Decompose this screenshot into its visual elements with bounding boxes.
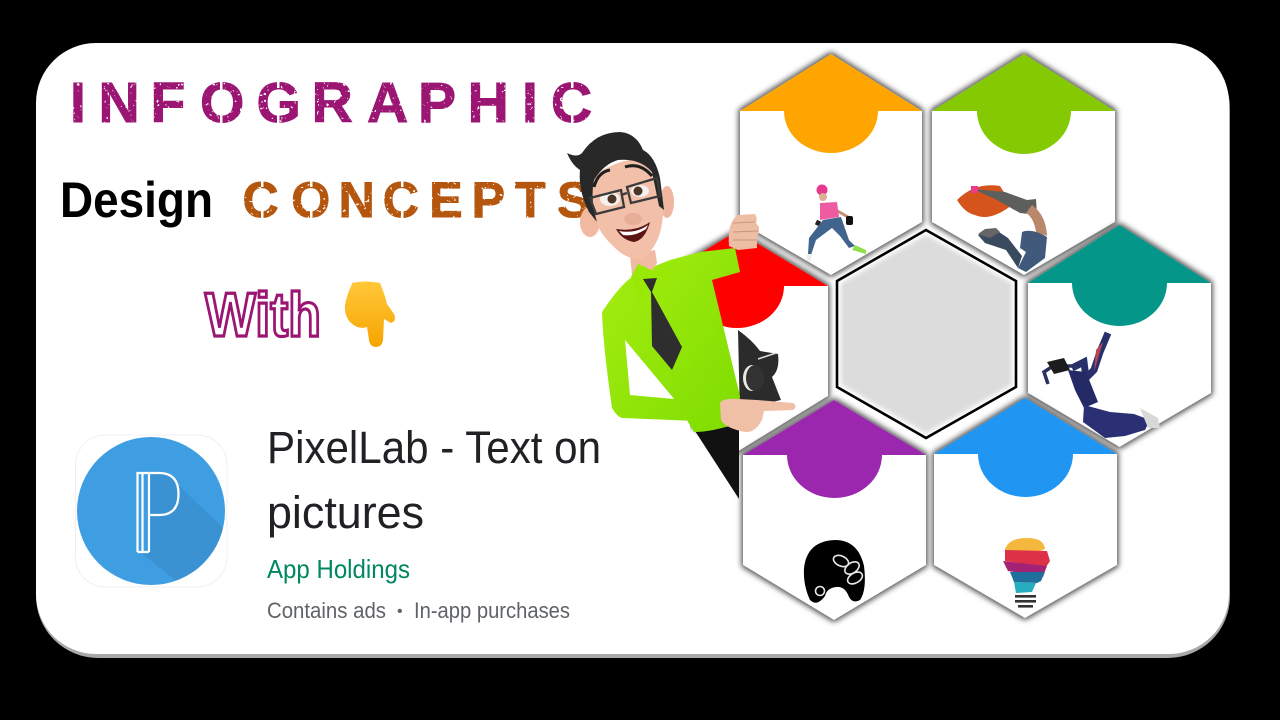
heading: Design: Design bbox=[60, 172, 213, 228]
app notes bbox=[267, 598, 570, 623]
hexagon: purple bbox=[743, 400, 926, 620]
app notes: Contains ads bbox=[267, 598, 386, 623]
app notes: • bbox=[397, 603, 403, 620]
heading: CONCEPTS: CONCEPTS bbox=[242, 172, 590, 228]
app notes: In-app purchases bbox=[414, 598, 570, 623]
head bbox=[590, 159, 663, 259]
app title: pictures bbox=[267, 487, 424, 538]
hair bbox=[567, 132, 664, 222]
hexagon: teal bbox=[1028, 225, 1211, 447]
app developer: App Holdings bbox=[267, 554, 410, 584]
hexagon: green bbox=[932, 54, 1115, 275]
hexagon: red bbox=[682, 228, 834, 457]
outlined word: With: With bbox=[205, 281, 321, 350]
app title bbox=[267, 422, 601, 538]
trousers bbox=[695, 425, 739, 499]
icon: pointing down hand emoji bbox=[345, 282, 395, 347]
dancer: pink top and jeans bbox=[806, 184, 866, 261]
dancer silhouette: dark figure bbox=[738, 330, 781, 402]
white rounded card bbox=[36, 43, 1230, 658]
collar bbox=[631, 262, 672, 302]
center hexagon: grey bbox=[837, 230, 1016, 438]
glasses and eyes bbox=[590, 178, 660, 214]
hexagon: orange bbox=[740, 54, 922, 275]
right ear bbox=[660, 186, 674, 218]
icon: artist palette bbox=[804, 540, 865, 603]
app title: PixelLab - Text on bbox=[267, 422, 601, 473]
icon: colourful light bulb bbox=[1003, 538, 1050, 608]
heading: INFOGRAPHIC: INFOGRAPHIC bbox=[70, 71, 592, 135]
cartoon man pointing bbox=[567, 132, 796, 499]
pointing hand bbox=[720, 399, 796, 432]
left ear bbox=[580, 207, 600, 237]
eyebrows bbox=[594, 166, 652, 187]
dancer: red hair backbend bbox=[957, 185, 1047, 272]
left arm and torso: lime shirt bbox=[602, 248, 740, 432]
dancer: hat and blue suit bbox=[1044, 333, 1160, 438]
upper hand bbox=[729, 214, 759, 250]
smile bbox=[616, 222, 650, 242]
icon: PixelLab app icon bbox=[76, 435, 227, 600]
neck bbox=[630, 250, 657, 280]
tie bbox=[643, 278, 682, 370]
hexagon: blue bbox=[934, 398, 1117, 618]
nose bbox=[624, 213, 642, 225]
